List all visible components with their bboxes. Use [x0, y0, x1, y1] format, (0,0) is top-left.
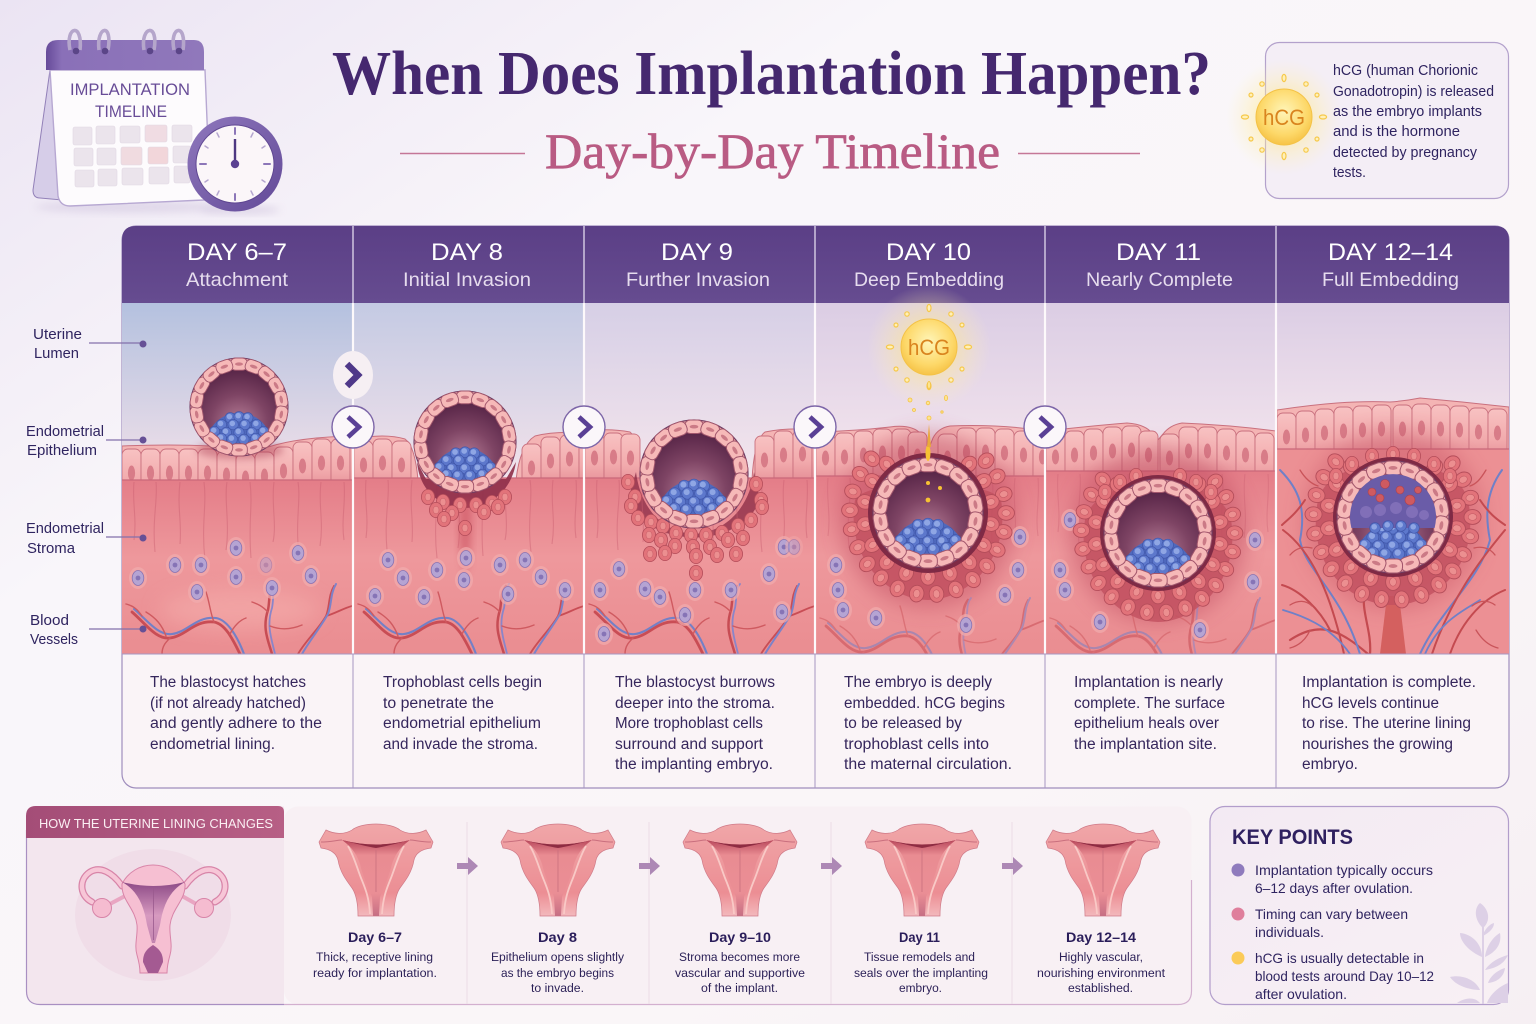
- stage: day 11: Tissue remodels and: [864, 950, 975, 964]
- calendar title: [70, 80, 190, 121]
- text: day 8: and invade the stroma.: [383, 736, 538, 753]
- text: day 10: the maternal circulation.: [844, 756, 1012, 773]
- arrow: stray chevron: [333, 351, 373, 399]
- icon: full uterus: [75, 849, 231, 981]
- title: When Does Implantation Happen?: [332, 40, 1211, 108]
- stage: day 8: as the embryo begins: [501, 966, 614, 980]
- point 1: Implantation typically occurs: [1255, 862, 1433, 878]
- heading: day 6-7: DAY 6–7: [187, 239, 287, 266]
- heading: day 8: DAY 8: [431, 239, 503, 266]
- illustration: day 9 further invasion: [585, 303, 831, 654]
- arrow: [639, 857, 660, 875]
- arrow: [1002, 857, 1023, 875]
- stage: day 8: Epithelium opens slightly: [491, 950, 625, 964]
- stage: day 9-10: vascular and supportive: [675, 966, 805, 980]
- icon: hCG sun: [1226, 59, 1342, 175]
- subtitle: Day-by-Day Timeline: [545, 123, 1000, 179]
- text: day 9: deeper into the stroma.: [615, 695, 775, 712]
- icon: hCG sun with droplets: hCG: [908, 335, 950, 360]
- text: day 9: The blastocyst burrows: [615, 674, 775, 691]
- panel: how the uterine lining changes: [26, 806, 1192, 1004]
- arrow: [457, 857, 478, 875]
- stage: day 6-7: Thick, receptive lining: [316, 950, 433, 964]
- heading: day 6-7: [186, 239, 289, 291]
- icon: hCG sun with droplets: [867, 285, 991, 447]
- panel: hCG note: and is the hormone: [1333, 124, 1460, 140]
- text: day 10: The embryo is deeply: [844, 674, 992, 691]
- text: day 9: [615, 674, 775, 773]
- labels: layer names: Lumen: [34, 346, 79, 362]
- stage: day 12-14: [1037, 824, 1166, 995]
- illustration: day 10 deep embedding: [816, 303, 1052, 668]
- labels: layer names: [26, 327, 146, 648]
- heading: day 12-14: DAY 12–14: [1328, 239, 1453, 266]
- text: day 6-7: endometrial lining.: [150, 736, 275, 753]
- point 3: hCG is usually detectable in: [1255, 950, 1424, 966]
- panel: hCG note: [1226, 42, 1508, 198]
- text: day 9: surround and support: [615, 736, 764, 753]
- icon: leaf decoration: [1450, 903, 1508, 1004]
- stage: day 6-7: [313, 824, 437, 980]
- text: day 9: More trophoblast cells: [615, 715, 763, 732]
- text: day 6-7: and gently adhere to the: [150, 715, 322, 732]
- text: day 6-7: [150, 674, 322, 753]
- calendar title: TIMELINE: [95, 102, 167, 121]
- panel: hCG note: detected by pregnancy: [1333, 145, 1478, 161]
- point 1: 6–12 days after ovulation.: [1255, 880, 1413, 896]
- illustration: day 12-14 full embedding: [1277, 303, 1509, 654]
- heading: day 12-14: Full Embedding: [1322, 269, 1459, 291]
- illustration: day 8 initial invasion: [354, 303, 598, 654]
- stage: day 6-7: ready for implantation.: [313, 966, 437, 980]
- heading: day 9: [626, 239, 770, 291]
- text: day 11: the implantation site.: [1074, 736, 1217, 753]
- stage: day 9-10: [675, 824, 805, 995]
- icon: hCG sun: hCG: [1263, 105, 1305, 130]
- text: day 10: to be released by: [844, 715, 962, 732]
- stage: day 12-14: nourishing environment: [1037, 966, 1166, 980]
- heading: day 8: Initial Invasion: [403, 269, 531, 291]
- stage: day 6-7: Day 6–7: [348, 929, 402, 945]
- text: day 10: [844, 674, 1012, 773]
- panel: hCG note: hCG (human Chorionic: [1333, 63, 1478, 79]
- text panel dividers: [122, 654, 1509, 788]
- stage: day 9-10: Stroma becomes more: [679, 950, 800, 964]
- heading: day 11: DAY 11: [1116, 239, 1201, 266]
- labels: layer names: Vessels: [30, 632, 78, 648]
- panel: hCG note: Gonadotropin) is released: [1333, 84, 1494, 100]
- labels: layer names: Blood: [30, 613, 69, 629]
- illustration: day 6-7 attachment: [122, 303, 369, 654]
- text: day 10: embedded. hCG begins: [844, 695, 1005, 712]
- text: day 6-7: The blastocyst hatches: [150, 674, 306, 691]
- text: day 8: Trophoblast cells begin: [383, 674, 542, 691]
- labels: layer names: Stroma: [27, 541, 76, 557]
- column dividers: [353, 303, 1276, 654]
- text: day 11: epithelium heals over: [1074, 715, 1219, 732]
- text: day 11: Implantation is nearly: [1074, 674, 1223, 691]
- arrow: day 9 to day 10: [794, 406, 836, 448]
- arrow: day 8 to day 9: [563, 406, 605, 448]
- stage: day 8: to invade.: [531, 981, 584, 995]
- stage: day 11: embryo.: [899, 981, 942, 995]
- text: day 8: endometrial epithelium: [383, 715, 541, 732]
- stage: day 8: [491, 824, 625, 995]
- arrow: [821, 857, 842, 875]
- point 2: [1232, 906, 1408, 940]
- heading: day 9: Further Invasion: [626, 269, 770, 291]
- stage: day 12-14: Highly vascular,: [1059, 950, 1143, 964]
- stage: day 11: [854, 824, 988, 995]
- labels: layer names: Endometrial: [26, 521, 104, 537]
- panel: timeline table card: [122, 226, 1509, 788]
- enlarged embryo cavity: [1350, 474, 1436, 533]
- text: day 8: [383, 674, 542, 753]
- stage: day 12-14: Day 12–14: [1066, 929, 1136, 945]
- heading banner: [26, 806, 284, 838]
- heading: day 12-14: [1322, 239, 1459, 291]
- heading: day 11: [1086, 239, 1233, 291]
- text: day 11: complete. The surface: [1074, 695, 1225, 712]
- stage: day 11: Day 11: [899, 929, 940, 945]
- text: day 12-14: to rise. The uterine lining: [1302, 715, 1471, 732]
- text: day 8: to penetrate the: [383, 695, 494, 712]
- point 1: [1232, 862, 1433, 896]
- heading: day 9: DAY 9: [661, 239, 733, 266]
- heading: day 10: DAY 10: [886, 239, 971, 266]
- calendar title: IMPLANTATION: [70, 80, 190, 99]
- heading banner: HOW THE UTERINE LINING CHANGES: [39, 816, 273, 831]
- calendar and clock icon: [33, 30, 282, 214]
- text: day 11: [1074, 674, 1225, 753]
- stage: day 8: Day 8: [538, 929, 577, 945]
- text: day 10: trophoblast cells into: [844, 736, 989, 753]
- clock: [188, 116, 282, 214]
- text: day 6-7: (if not already hatched): [150, 695, 306, 712]
- stage: day 11: seals over the implanting: [854, 966, 988, 980]
- heading: day 8: [403, 239, 531, 291]
- point 3: [1232, 950, 1434, 1002]
- panel: hCG note: tests.: [1333, 165, 1366, 181]
- point 3: after ovulation.: [1255, 986, 1347, 1002]
- text: day 12-14: embryo.: [1302, 756, 1358, 773]
- panel: hCG note: as the embryo implants: [1333, 104, 1482, 120]
- labels: layer names: Uterine: [33, 327, 82, 343]
- illustration: day 11 nearly complete: [1046, 303, 1276, 668]
- arrow: day 6-7 to day 8: [332, 406, 374, 448]
- arrow: day 10 to day 11: [1024, 406, 1066, 448]
- text: day 12-14: [1302, 674, 1476, 773]
- labels: layer names: Endometrial: [26, 424, 104, 440]
- point 2: individuals.: [1255, 924, 1324, 940]
- stage: day 9-10: of the implant.: [701, 981, 778, 995]
- text: day 9: the implanting embryo.: [615, 756, 773, 773]
- text: day 12-14: hCG levels continue: [1302, 695, 1439, 712]
- heading: day 10: Deep Embedding: [854, 269, 1004, 291]
- labels: layer names: Epithelium: [27, 443, 97, 459]
- panel: key points: [1210, 806, 1508, 1004]
- text: day 12-14: Implantation is complete.: [1302, 674, 1476, 691]
- point 3: blood tests around Day 10–12: [1255, 968, 1434, 984]
- heading: day 6-7: Attachment: [186, 269, 289, 291]
- header band: [122, 226, 1509, 303]
- text: day 12-14: nourishes the growing: [1302, 736, 1453, 753]
- heading: KEY POINTS: [1232, 826, 1353, 849]
- stage: day 9-10: Day 9–10: [709, 929, 771, 945]
- heading: day 10: [854, 239, 1004, 291]
- point 2: Timing can vary between: [1255, 906, 1408, 922]
- heading: day 11: Nearly Complete: [1086, 269, 1233, 291]
- stage: day 12-14: established.: [1068, 981, 1133, 995]
